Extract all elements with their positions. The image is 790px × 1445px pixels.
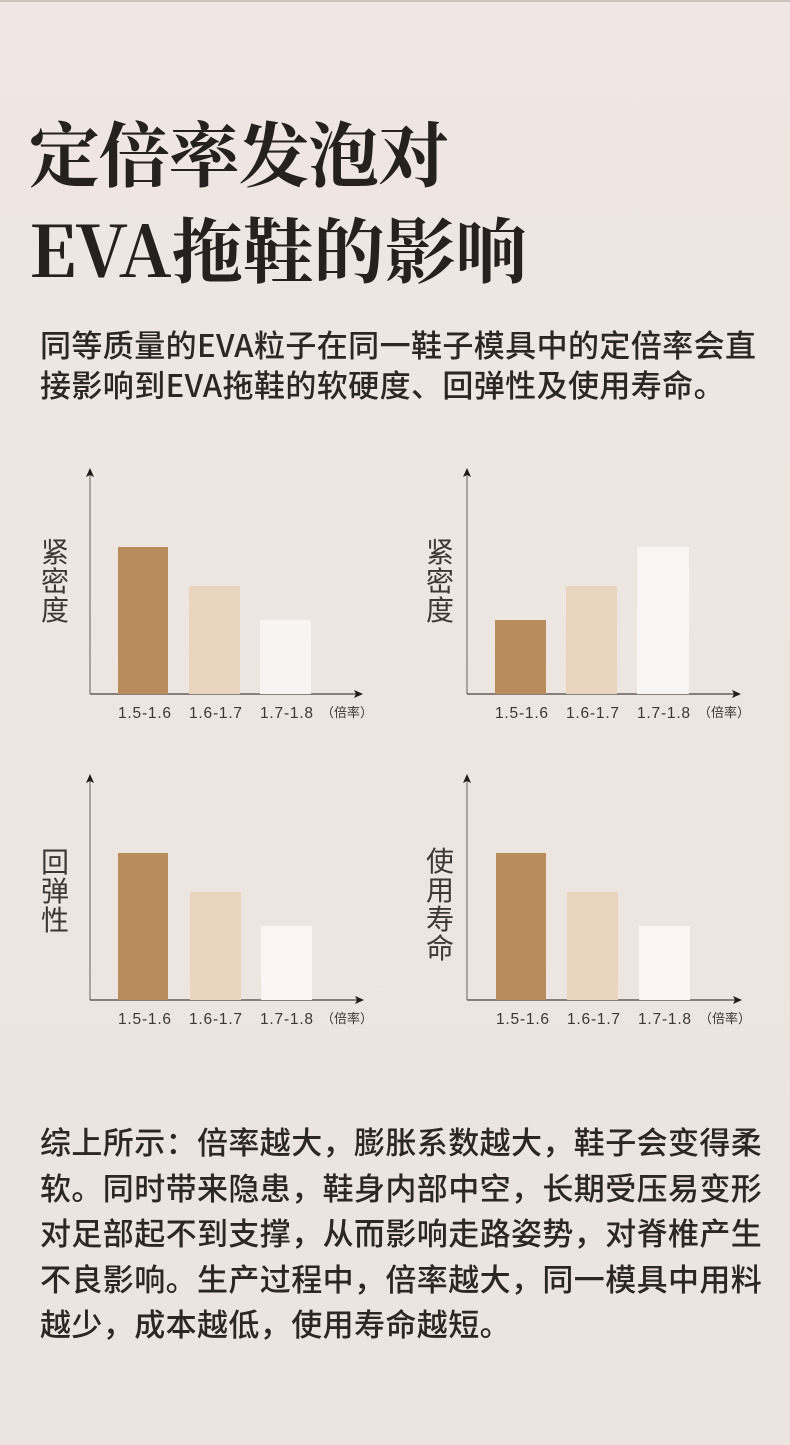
y-axis label: 回 bbox=[41, 841, 69, 881]
summary text: 软。同时带来隐患，鞋身内部中空，长期受压易变形 bbox=[40, 1164, 762, 1209]
x-axis labels: 1.6-1.7 bbox=[567, 1011, 621, 1028]
x-axis labels: 1.5-1.6 bbox=[118, 1011, 172, 1028]
x-axis labels bbox=[118, 1008, 373, 1028]
summary text: 综上所示：倍率越大，膨胀系数越大，鞋子会变得柔 bbox=[40, 1118, 762, 1163]
x-axis labels: （倍率） bbox=[321, 1008, 373, 1027]
x-axis labels: 1.6-1.7 bbox=[189, 705, 243, 722]
title bbox=[29, 100, 527, 298]
chart: rebound bbox=[41, 776, 373, 1028]
bars bbox=[495, 547, 689, 694]
x-axis labels: （倍率） bbox=[321, 702, 373, 721]
axes bbox=[467, 470, 739, 694]
x-axis labels: 1.6-1.7 bbox=[566, 705, 620, 722]
x-axis labels bbox=[495, 702, 750, 722]
x-axis labels: 1.5-1.6 bbox=[118, 705, 172, 722]
x-axis labels: 1.6-1.7 bbox=[189, 1011, 243, 1028]
y-axis label bbox=[426, 531, 454, 629]
x-axis labels: （倍率） bbox=[699, 1008, 751, 1027]
y-axis label bbox=[41, 531, 69, 629]
top edge strip bbox=[0, 0, 790, 2]
title: EVA拖鞋的影响 bbox=[29, 196, 527, 298]
bars bbox=[496, 853, 690, 1000]
x-axis labels bbox=[118, 702, 373, 722]
bars bbox=[118, 853, 312, 1000]
y-axis label: 使 bbox=[426, 840, 454, 880]
title: 定倍率发泡对 bbox=[29, 100, 448, 202]
summary text bbox=[40, 1118, 762, 1345]
summary text: 越少，成本越低，使用寿命越短。 bbox=[40, 1300, 511, 1345]
x-axis labels: （倍率） bbox=[698, 702, 750, 721]
y-axis label: 密 bbox=[426, 560, 454, 600]
x-axis labels: 1.7-1.8 bbox=[637, 705, 691, 722]
x-axis labels: 1.5-1.6 bbox=[496, 1011, 550, 1028]
y-axis label: 性 bbox=[41, 899, 69, 939]
x-axis labels: 1.7-1.8 bbox=[260, 705, 314, 722]
y-axis label bbox=[426, 840, 454, 967]
y-axis label: 度 bbox=[41, 589, 69, 629]
summary text: 不良影响。生产过程中，倍率越大，同一模具中用料 bbox=[40, 1255, 762, 1300]
chart: density falling bbox=[41, 470, 373, 722]
intro text: 同等质量的EVA粒子在同一鞋子模具中的定倍率会直 bbox=[40, 321, 756, 366]
y-axis label: 弹 bbox=[41, 870, 69, 910]
y-axis label: 紧 bbox=[41, 531, 69, 571]
intro text bbox=[40, 321, 756, 406]
x-axis labels: 1.5-1.6 bbox=[495, 705, 549, 722]
summary text: 对足部起不到支撑，从而影响走路姿势，对脊椎产生 bbox=[40, 1209, 762, 1254]
y-axis label: 度 bbox=[426, 589, 454, 629]
intro text: 接影响到EVA拖鞋的软硬度、回弹性及使用寿命。 bbox=[40, 360, 725, 406]
y-axis label: 紧 bbox=[426, 531, 454, 571]
axes bbox=[90, 776, 362, 1000]
x-axis labels bbox=[496, 1008, 751, 1028]
axes bbox=[90, 470, 361, 694]
chart: service life bbox=[426, 776, 751, 1028]
y-axis label: 密 bbox=[41, 560, 69, 600]
axes bbox=[467, 776, 740, 1000]
y-axis label: 用 bbox=[426, 869, 454, 909]
chart: density rising bbox=[426, 470, 750, 722]
y-axis label: 命 bbox=[426, 927, 454, 967]
y-axis label: 寿 bbox=[426, 898, 454, 938]
x-axis labels: 1.7-1.8 bbox=[638, 1011, 692, 1028]
x-axis labels: 1.7-1.8 bbox=[260, 1011, 314, 1028]
y-axis label bbox=[41, 841, 69, 939]
bars bbox=[118, 547, 311, 694]
